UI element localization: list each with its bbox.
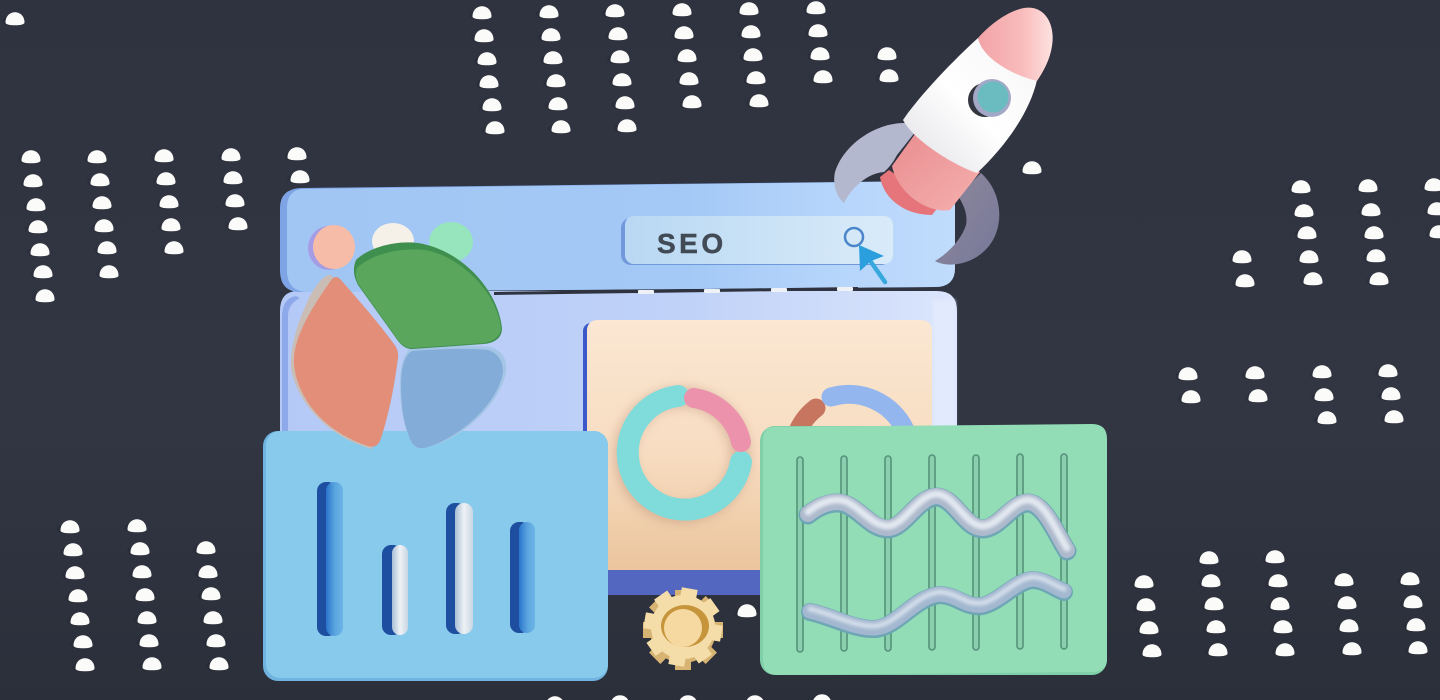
rocket body [903, 38, 1037, 173]
rocket nose [978, 8, 1053, 81]
vertical grid lines [797, 454, 1067, 652]
panel: browser window body [280, 291, 957, 595]
chart: first donut ring [624, 396, 741, 513]
pie slice: blue [400, 346, 506, 448]
panel: browser toolbar [280, 181, 955, 295]
panel: peach chart card [583, 320, 932, 573]
pie slice: green [354, 242, 502, 349]
rocket fin right [935, 173, 999, 265]
icon: gear [643, 587, 723, 670]
dot field: top centre [469, 1, 898, 135]
chart: 3D pie [291, 242, 506, 449]
search box with SEO label: SEO [657, 228, 727, 259]
rocket flange [880, 170, 940, 215]
dot field: upper left [2, 12, 310, 303]
bar 4 [510, 522, 535, 633]
chart line upper [808, 494, 1067, 551]
gap strip between toolbar and body [494, 287, 858, 295]
rocket skirt [892, 134, 980, 211]
window control buttons [308, 222, 473, 270]
pie slice: salmon [291, 275, 398, 449]
panel: blue bar chart card [263, 431, 608, 681]
bar 2 [382, 545, 408, 635]
rocket fin left [834, 123, 916, 203]
chart line lower [810, 577, 1064, 629]
icon: search lens and cursor arrow [845, 228, 885, 282]
bar 3 [446, 503, 473, 634]
rocket window [968, 79, 1011, 117]
chart: second donut ring [796, 394, 905, 436]
dot field: right [1019, 161, 1440, 425]
search box with SEO label [621, 216, 893, 265]
dot field: bottom edge [542, 604, 832, 700]
panel: green line chart card [760, 424, 1107, 675]
toolbar notches [638, 287, 853, 294]
dot field: lower right [1131, 550, 1428, 658]
dot field: lower left [57, 519, 228, 672]
bar 1 [317, 482, 343, 636]
rocket [834, 8, 1053, 265]
